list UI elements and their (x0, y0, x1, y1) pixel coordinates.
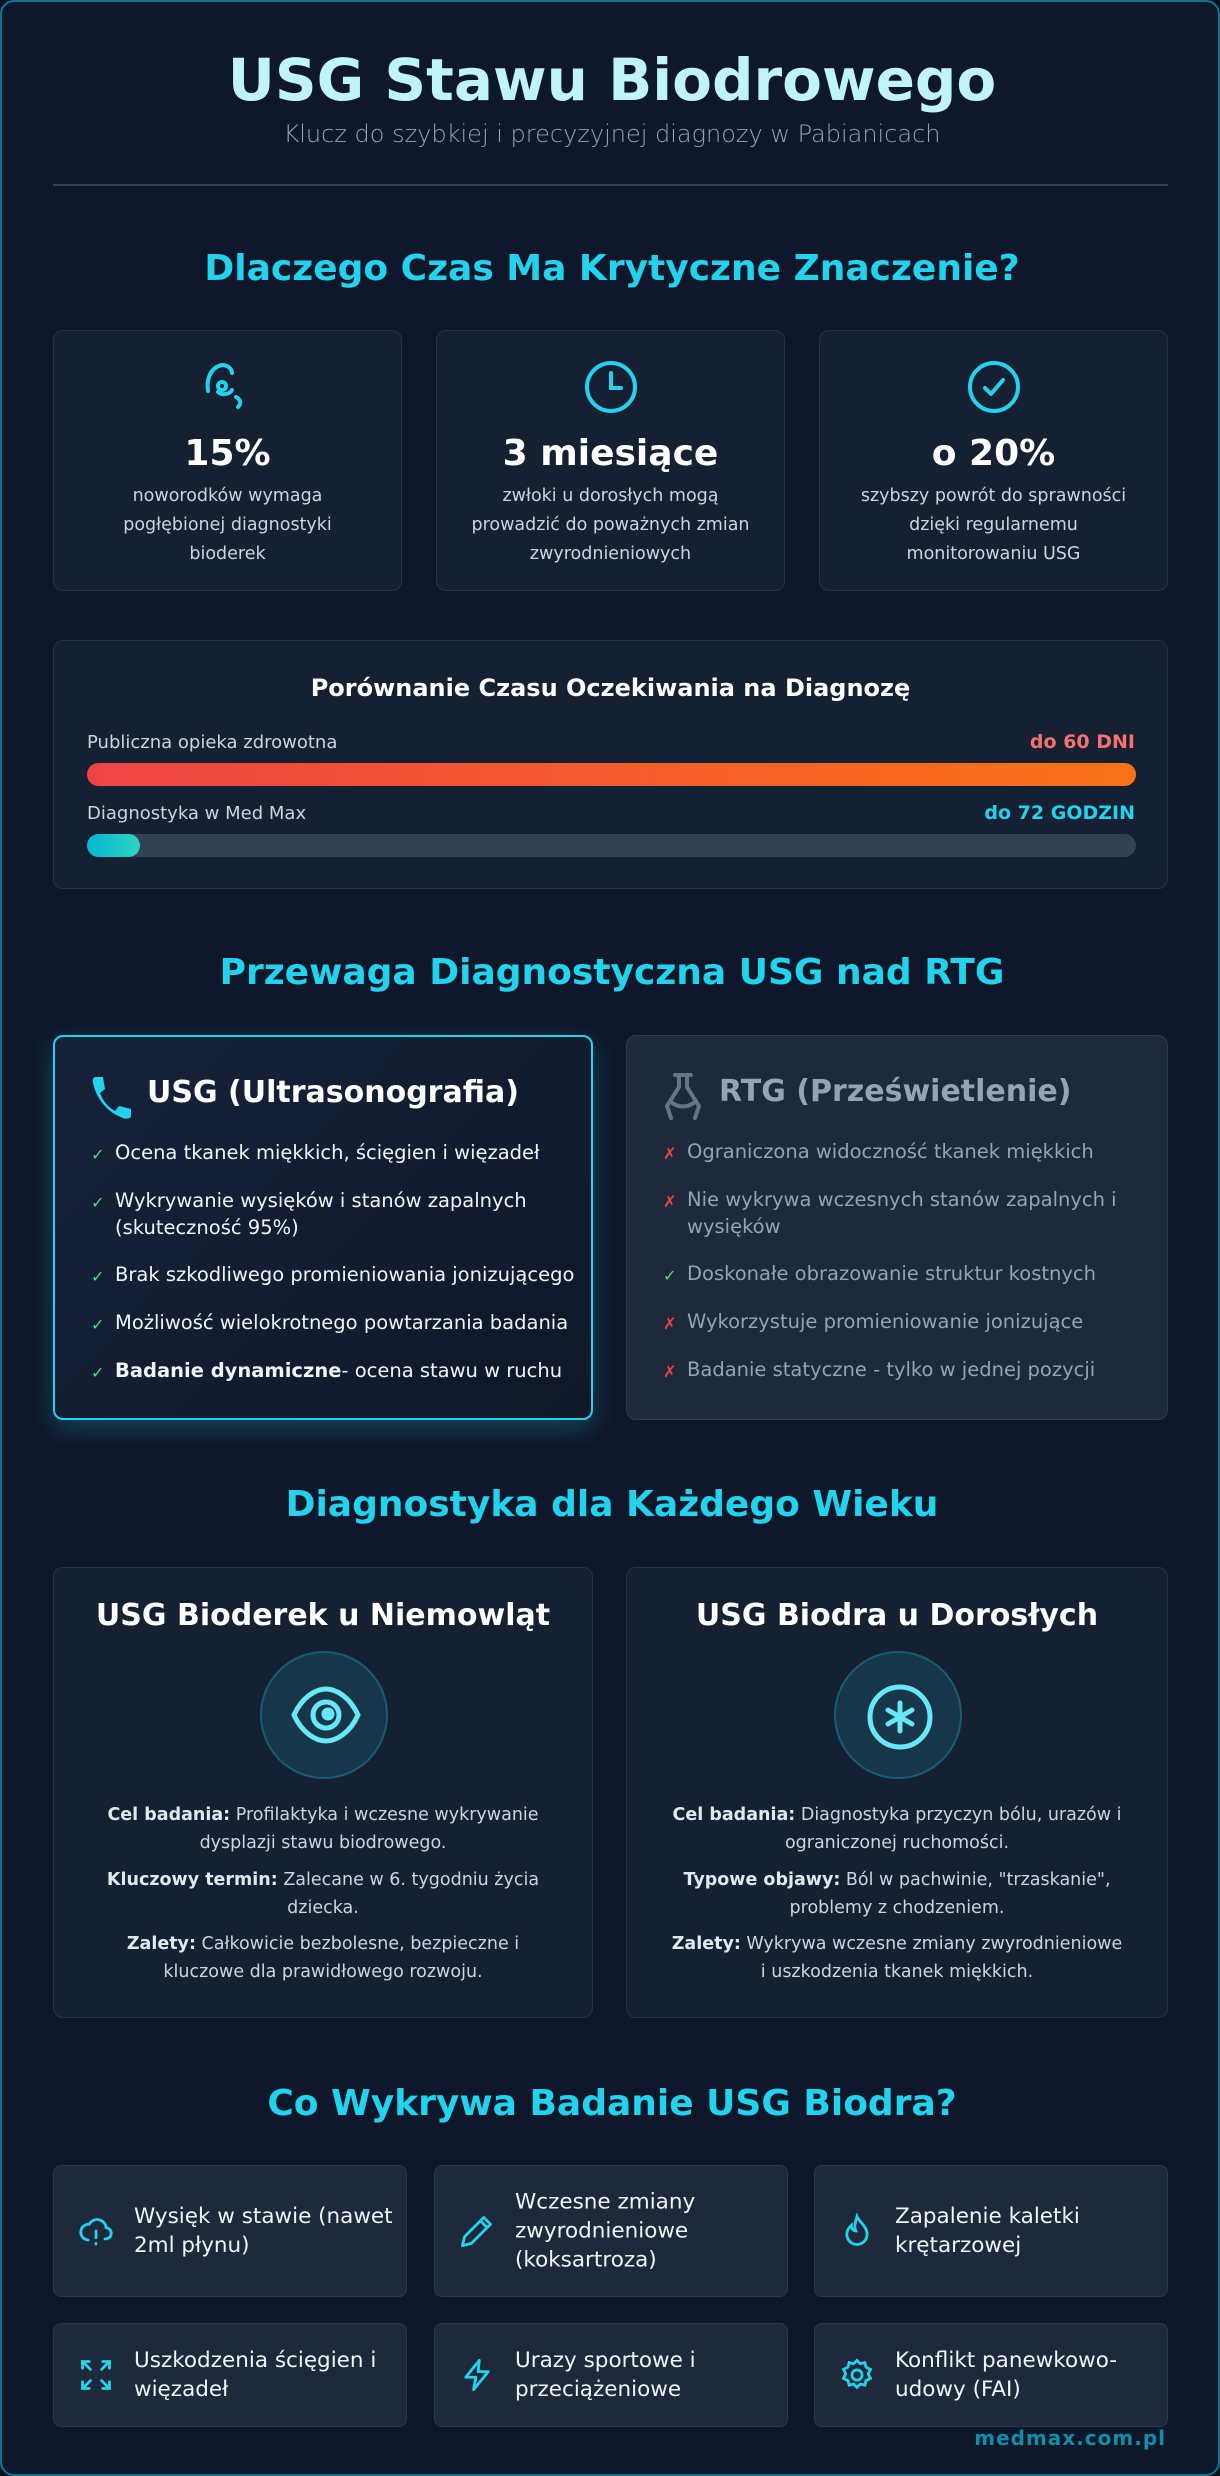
adults title: USG Biodra u Dorosłych (696, 1598, 1098, 1633)
panel: adults: i uszkodzenia tkanek miękkich. (761, 1962, 1033, 1982)
USG list: ✓ (91, 1193, 104, 1212)
icon: flask/xray (664, 1073, 702, 1120)
tile: FAI: Konflikt panewkowo-udowy (FAI) (895, 2348, 1117, 2402)
infants text: Cel badania: Profilaktyka i wczesne wykrywanie dysplazji stawu biodrowego. (107, 1805, 539, 1853)
stat description: zwłoki u dorosłych mogą prowadzić do poważnych zmian zwyrodnieniowych (471, 486, 750, 564)
subtitle: Klucz do szybkiej i precyzyjnej diagnozy w Pabianicach (283, 120, 941, 148)
icon: phone (92, 1077, 131, 1119)
tile: tendons: Uszkodzenia ścięgien i więzadeł (134, 2348, 376, 2402)
infants title: USG Bioderek u Niemowląt (96, 1598, 550, 1633)
tile: tendons (53, 2323, 407, 2427)
heading: every age: Diagnostyka dla Każdego Wieku (286, 1484, 938, 1525)
USG list: ✓ (91, 1267, 104, 1286)
panel: USG (53, 1035, 593, 1420)
RTG list: Doskonałe obrazowanie struktur kostnych (687, 1262, 1096, 1285)
stat description: noworodków wymaga pogłębionej diagnostyki bioderek (123, 486, 332, 564)
heading: why time matters: Dlaczego Czas Ma Krytyczne Znaczenie? (204, 248, 1020, 289)
heading: what it detects: Co Wykrywa Badanie USG Biodra? (267, 2083, 957, 2124)
RTG header: RTG (Prześwietlenie) (719, 1074, 1071, 1109)
adults text: Cel badania: Diagnostyka przyczyn bólu, urazów i ograniczonej ruchomości. (673, 1805, 1121, 1853)
tile: effusion (53, 2165, 407, 2297)
panel: adults: Typowe objawy: Ból w pachwinie, "trzaskanie", problemy z chodzeniem. (683, 1870, 1111, 1918)
icon: check circle (968, 361, 1020, 413)
stat card 1 (53, 330, 402, 591)
USG list: Badanie dynamiczne- ocena stawu w ruchu (115, 1359, 562, 1382)
stat number: 3 miesiące (503, 433, 718, 474)
panel: infants: Kluczowy termin: Zalecane w 6. tygodniu życia dziecka. (107, 1870, 539, 1918)
panel: adults: Zalety: Wykrywa wczesne zmiany zwyrodnieniowe (672, 1934, 1122, 1954)
bar chart: public (87, 731, 1136, 786)
panel: waiting time comparison (53, 640, 1168, 889)
icon: eye in circle (260, 1651, 388, 1779)
USG list (91, 1141, 574, 1382)
bar chart: public: Publiczna opieka zdrowotna (87, 732, 337, 753)
panel: infants: Zalety: Całkowicie bezbolesne, bezpieczne i kluczowe dla prawidłowego rozwoju. (127, 1934, 519, 1982)
USG list: Ocena tkanek miękkich, ścięgien i więzadeł (115, 1141, 540, 1164)
RTG list: ✗ (663, 1144, 676, 1163)
bar chart: Med Max: Diagnostyka w Med Max (87, 803, 306, 824)
bar chart: Med Max (87, 802, 1136, 857)
tile: degenerative (434, 2165, 788, 2297)
USG header (92, 1075, 519, 1119)
RTG list: Wykorzystuje promieniowanie jonizujące (687, 1310, 1083, 1333)
USG list: ✓ (91, 1315, 104, 1334)
RTG list: Ograniczona widoczność tkanek miękkich (687, 1140, 1094, 1163)
RTG list: ✗ (663, 1362, 676, 1381)
tile: bursitis: Zapalenie kaletki krętarzowej (895, 2204, 1080, 2258)
stat number: o 20% (932, 433, 1055, 474)
title: USG Stawu Biodrowego (228, 46, 996, 114)
RTG list (663, 1140, 1117, 1381)
stat number: 15% (184, 433, 271, 474)
stat card 3 (819, 330, 1168, 591)
tile: FAI (814, 2323, 1168, 2427)
USG list: ✓ (91, 1145, 104, 1164)
USG header: USG (Ultrasonografia) (147, 1075, 519, 1110)
RTG list: ✗ (663, 1314, 676, 1333)
tile: degenerative: Wczesne zmiany zwyrodnieniowe (koksartroza) (515, 2190, 695, 2272)
tile: effusion: Wysięk w stawie (nawet 2ml płynu) (134, 2204, 393, 2258)
USG list: ✓ (91, 1363, 104, 1382)
icon: clock (585, 361, 637, 413)
panel: adults (626, 1567, 1168, 2018)
stat description: szybszy powrót do sprawności dzięki regularnemu monitorowaniu USG (861, 486, 1126, 564)
RTG list: Nie wykrywa wczesnych stanów zapalnych i wysięków (687, 1188, 1117, 1238)
icon: baby (206, 363, 242, 410)
USG list: Brak szkodliwego promieniowania jonizującego (115, 1263, 574, 1286)
RTG list: Badanie statyczne - tylko w jednej pozycji (687, 1358, 1095, 1381)
heading: USG vs RTG: Przewaga Diagnostyczna USG nad RTG (220, 952, 1004, 993)
RTG header (664, 1073, 1071, 1120)
tile: sports injuries (434, 2323, 788, 2427)
panel: infants (53, 1567, 593, 2018)
USG list: Wykrywanie wysięków i stanów zapalnych (skuteczność 95%) (115, 1189, 527, 1239)
bar chart: Med Max: do 72 GODZIN (984, 802, 1135, 824)
icon: asterisk in circle (834, 1651, 962, 1779)
tile: sports injuries: Urazy sportowe i przeciążeniowe (515, 2348, 696, 2402)
RTG list: ✓ (663, 1266, 676, 1285)
USG list: Możliwość wielokrotnego powtarzania badania (115, 1311, 568, 1334)
RTG list: ✗ (663, 1192, 676, 1211)
footer: website: medmax.com.pl (974, 2426, 1166, 2450)
panel: RTG (626, 1035, 1168, 1420)
stat card 2 (436, 330, 785, 591)
tile: bursitis (814, 2165, 1168, 2297)
comparison title: Porównanie Czasu Oczekiwania na Diagnozę (311, 674, 910, 702)
bar chart: public: do 60 DNI (1030, 731, 1135, 753)
